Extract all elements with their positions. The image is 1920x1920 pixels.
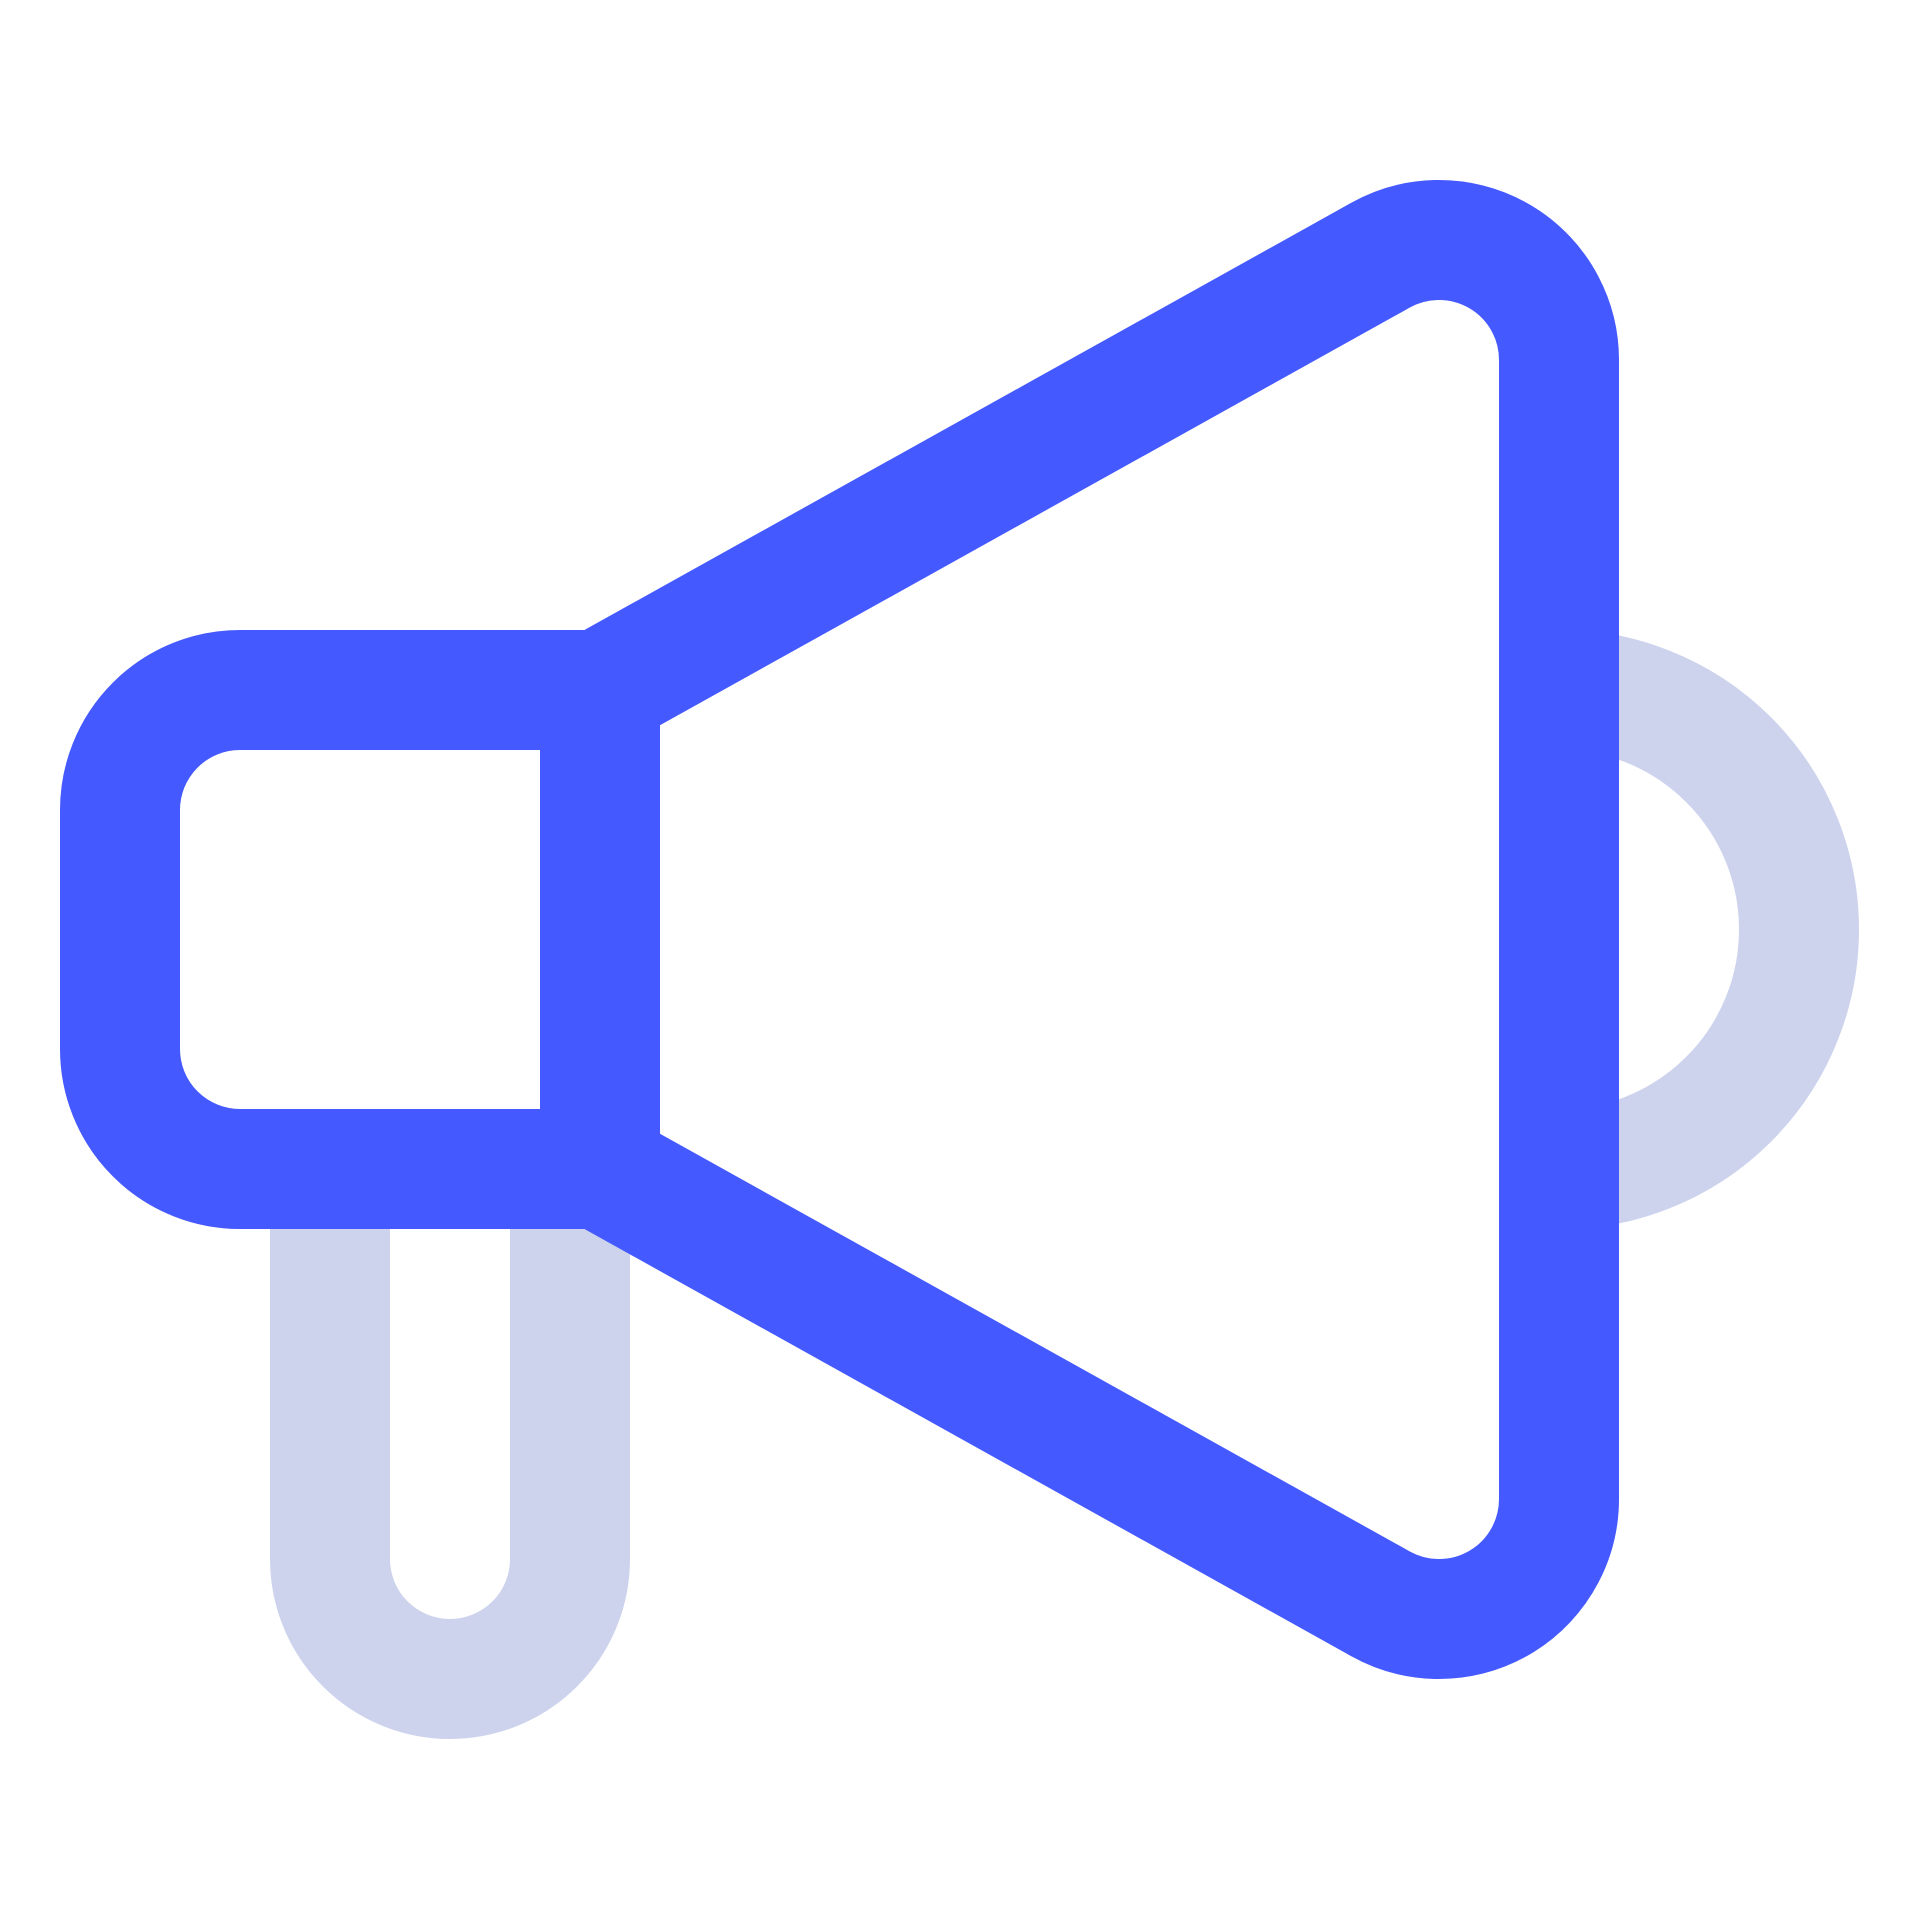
icon part: sound arc <box>1559 690 1799 1170</box>
icon part: megaphone horn <box>600 240 1559 1619</box>
icon part: handle <box>330 1169 570 1679</box>
icon part: megaphone body <box>120 690 600 1169</box>
